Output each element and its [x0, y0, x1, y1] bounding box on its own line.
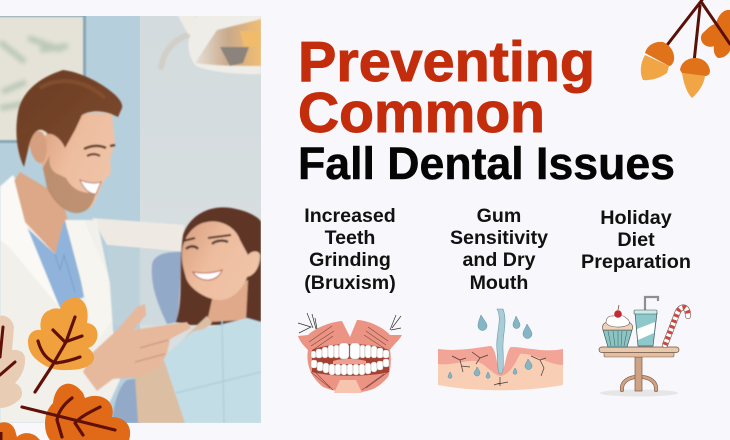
soda cup — [634, 297, 658, 346]
heading: Gum — [477, 205, 521, 227]
chair — [108, 246, 184, 423]
column: increased teeth grinding — [298, 205, 402, 393]
heading: Mouth — [470, 272, 528, 294]
fall leaves over photo — [0, 298, 130, 440]
title — [298, 30, 675, 189]
heading: Increased — [304, 205, 396, 227]
acorn 2 — [680, 58, 710, 98]
heading: Teeth — [325, 227, 375, 249]
patient — [135, 207, 261, 423]
icon: clenched jaw — [298, 313, 402, 393]
candy cane — [665, 307, 688, 345]
wall picture — [0, 14, 86, 143]
dentist — [0, 70, 191, 423]
leaf: tan — [0, 316, 25, 408]
heading: and Dry — [463, 249, 536, 271]
leaf: light orange — [28, 298, 98, 392]
title line 2: Common — [298, 81, 545, 145]
heading: Preparation — [581, 251, 691, 273]
heading: Grinding — [309, 249, 391, 271]
dental lamp — [161, 14, 261, 74]
title line 1: Preventing — [298, 30, 595, 94]
column: holiday diet — [581, 207, 691, 396]
decoration: acorns and leaf — [641, 0, 730, 98]
title line 3: Fall Dental Issues — [298, 138, 675, 189]
heading: Diet — [617, 229, 655, 251]
column: gum sensitivity — [438, 205, 563, 390]
leaf: dark orange — [22, 384, 130, 440]
cupcake — [603, 305, 633, 347]
heading: Sensitivity — [450, 227, 548, 249]
oak leaf — [701, 10, 730, 58]
icon: treats on table — [599, 297, 688, 396]
icon: gum cross section with droplets — [438, 309, 563, 390]
heading: (Bruxism) — [304, 272, 396, 294]
acorn 1 — [641, 42, 674, 80]
photo: dentist and smiling patient — [0, 14, 261, 423]
upper teeth — [311, 343, 389, 359]
heading: Holiday — [600, 207, 672, 229]
lower teeth — [311, 359, 389, 375]
branches — [664, 0, 730, 62]
leaf: bottom corner — [0, 422, 40, 440]
headrest bar — [92, 218, 184, 252]
